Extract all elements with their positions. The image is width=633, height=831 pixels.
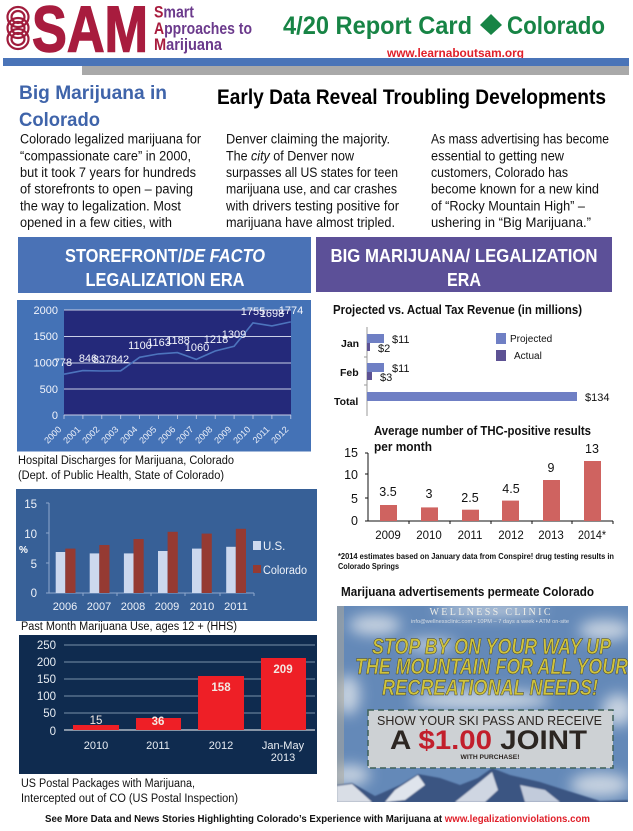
text column 2: marijuana have almost tripled.	[226, 215, 395, 230]
bar chart: tax revenue: Feb	[340, 367, 359, 379]
text column 1: but it took 7 years for hundreds	[20, 165, 196, 180]
footer link line: See More Data and News Stories Highlighting Colorado’s Experience with Marijuana at www.legalizationviolations.com	[45, 814, 590, 825]
report card title: 4/20 Report Card	[283, 12, 472, 40]
bar chart: postal packages: 36	[152, 716, 164, 728]
line chart: hospital discharges: 1163	[147, 337, 171, 349]
bar chart: postal packages	[19, 635, 317, 774]
subheading: Big Marijuana in Colorado: Colorado	[19, 109, 100, 131]
heading: THC results chart: Average number of THC-positive results	[374, 424, 591, 438]
bar chart: past month use: 2007	[87, 601, 111, 613]
line chart: hospital discharges: 2009	[212, 424, 233, 446]
text column 2: surpasses all US states for teen	[226, 165, 398, 180]
website link: www.learnaboutsam.org	[386, 48, 524, 60]
heading: tax revenue chart: Projected vs. Actual Tax Revenue (in millions)	[333, 303, 582, 317]
clinic name: WELLNESS CLINIC	[430, 607, 551, 618]
panel: storefront era banner: LEGALIZATION ERA	[86, 269, 244, 290]
coupon box	[368, 710, 613, 768]
header bars	[3, 58, 629, 75]
line chart: hospital discharges: 1218	[204, 334, 228, 346]
subheading: Big Marijuana in Colorado: Big Marijuana in	[19, 82, 167, 104]
bar chart: past month use: 2008	[121, 601, 145, 613]
bar chart: postal packages: 2010	[84, 740, 108, 752]
line chart: hospital discharges: 1100	[128, 340, 152, 352]
bar chart: postal packages: 150	[37, 674, 56, 686]
line chart: hospital discharges: 2010	[231, 424, 252, 446]
coupon box: A $1.00 JOINT	[390, 725, 588, 755]
bar chart: postal packages: Jan-May	[262, 740, 305, 752]
bar chart: past month use: 2010	[190, 601, 214, 613]
bar chart: THC positive results: 9	[548, 461, 555, 475]
advert headline	[356, 638, 628, 696]
subheading: Big Marijuana in Colorado	[19, 82, 167, 131]
bar chart: THC positive results: 5	[351, 492, 358, 506]
logo tagline	[154, 4, 252, 54]
bar chart: THC positive results: 2010	[416, 530, 442, 542]
bar chart: tax revenue: $11	[392, 334, 410, 346]
report card title	[283, 12, 605, 40]
bar chart: tax revenue: $134	[585, 392, 609, 404]
line chart: hospital discharges: 1774	[279, 305, 303, 317]
text column 2	[225, 132, 399, 230]
bar chart: THC positive results: 4.5	[502, 482, 520, 496]
bar chart: past month use: 2011	[224, 601, 248, 613]
text column 1: of storefronts to open – paving	[20, 182, 193, 196]
text column 3: ushering in “Big Marijuana.”	[431, 215, 591, 230]
bar chart: tax revenue	[334, 327, 609, 416]
bar chart: tax revenue: $11	[392, 363, 410, 375]
text column 3: become known for a new kind	[431, 182, 599, 196]
line chart: hospital discharges: 2004	[118, 424, 139, 446]
bar chart: past month use	[16, 489, 317, 621]
line chart: hospital discharges: 1000	[34, 358, 58, 370]
heading: advertisements: Marijuana advertisements permeate Colorado	[341, 585, 594, 599]
panel: big marijuana era banner	[316, 237, 612, 292]
mountains	[337, 768, 628, 803]
line chart: hospital discharges: 1698	[260, 308, 284, 320]
text column 1: Colorado legalized marijuana for	[20, 132, 201, 146]
line chart: hospital discharges: 1060	[185, 342, 209, 354]
bar chart: postal packages: 100	[37, 691, 56, 703]
caption: hospital discharges: Hospital Discharges for Marijuana, Colorado	[18, 455, 234, 467]
line chart: hospital discharges: 2012	[269, 424, 290, 446]
report card title: Colorado	[507, 12, 605, 40]
text column 2: marijuana use, and car crashes	[226, 182, 397, 196]
bar chart: postal packages: 250	[37, 640, 56, 652]
main heading: Early Data Reveal Troubling Developments	[217, 86, 606, 109]
text column 1: “compassionate care” in 2000,	[20, 148, 191, 164]
caption: postal packages: US Postal Packages with Marijuana,	[21, 778, 195, 790]
text column 3	[431, 132, 609, 230]
bar chart: past month use: 15	[24, 499, 37, 511]
line chart: hospital discharges: 2001	[61, 424, 82, 446]
header	[3, 0, 629, 75]
bar chart: past month use: 5	[31, 559, 37, 571]
bar chart: postal packages: 158	[211, 682, 231, 694]
clouds	[330, 604, 633, 797]
caption: past month use: Past Month Marijuana Use, ages 12 + (HHS)	[21, 621, 237, 633]
bar chart: THC positive results: 2.5	[461, 491, 479, 505]
line chart: hospital discharges: 2007	[174, 424, 195, 446]
heading: THC results chart	[374, 424, 591, 454]
bar chart: tax revenue: $2	[378, 343, 390, 355]
caption: hospital discharges: (Dept. of Public Health, State of Colorado)	[18, 470, 224, 482]
bar chart: postal packages: 0	[50, 726, 56, 738]
coupon box: WITH PURCHASE!	[460, 755, 520, 761]
line chart: hospital discharges: 2002	[80, 424, 101, 446]
bar chart: THC positive results: 15	[344, 446, 358, 460]
bar chart: postal packages: 2011	[146, 740, 170, 752]
bar chart: postal packages: 50	[43, 708, 56, 720]
bar chart: tax revenue: Actual	[514, 351, 542, 362]
bar chart: past month use: 0	[31, 588, 37, 600]
line chart: hospital discharges: 2000	[42, 424, 63, 446]
bar chart: postal packages: 209	[273, 664, 293, 676]
text column 2: Denver claiming the majority.	[226, 132, 390, 146]
bar chart: THC positive results: 3.5	[379, 485, 397, 499]
panel: storefront era banner: STOREFRONT/DE FACTO	[65, 245, 266, 266]
logo tagline: Marijuana	[154, 36, 223, 54]
coupon box: SHOW YOUR SKI PASS AND RECEIVE	[377, 713, 602, 728]
line chart: hospital discharges: 2008	[193, 424, 214, 446]
caption: postal packages: Intercepted out of CO (US Postal Inspection)	[21, 793, 238, 805]
bar chart: past month use: Colorado	[263, 565, 307, 577]
bar chart: THC positive results: 2011	[458, 530, 482, 542]
line chart: hospital discharges: 2005	[137, 424, 158, 446]
panel: big marijuana era banner: ERA	[447, 269, 481, 290]
bar chart: THC positive results: 2012	[498, 530, 524, 542]
photo: wellness clinic advertisement: info@wellnessclinic.com • 10PM – 7 days a week • ATM on-site	[411, 619, 569, 625]
text column 1: the way to legalization. Most	[20, 198, 181, 214]
line chart: hospital discharges: 837	[93, 354, 111, 366]
line chart: hospital discharges: 500	[40, 384, 58, 396]
text column 1: opened in a few cities, with	[20, 215, 172, 230]
line chart: hospital discharges: 2006	[156, 424, 177, 446]
bar chart: THC positive results	[344, 442, 613, 542]
line chart: hospital discharges: 842	[111, 354, 129, 366]
text column 3: As mass advertising has become	[431, 132, 609, 146]
footnote: 2014 estimates	[338, 552, 614, 571]
photo: wellness clinic advertisement	[330, 604, 633, 803]
caption: hospital discharges	[18, 455, 234, 482]
bar chart: THC positive results: 2009	[375, 530, 401, 542]
line chart: hospital discharges: 846	[79, 353, 97, 365]
line chart: hospital discharges: 2000	[34, 305, 58, 317]
footnote: 2014 estimates: Colorado Springs	[338, 562, 399, 571]
heading: THC results chart: per month	[374, 440, 432, 454]
bar chart: past month use: 2006	[53, 601, 77, 613]
text column 3: of “Rocky Mountain High” –	[431, 198, 585, 214]
line chart: hospital discharges: 0	[52, 410, 58, 422]
bar chart: THC positive results: 13	[585, 442, 599, 456]
bar chart: past month use: %	[19, 545, 28, 556]
logo tagline: Smart	[154, 4, 194, 22]
footnote: 2014 estimates: *2014 estimates based on January data from Conspire! drug testing results in	[338, 552, 614, 561]
bar chart: THC positive results: 10	[344, 468, 358, 482]
bar chart: THC positive results: 2014*	[578, 530, 606, 542]
text column 1	[20, 132, 201, 230]
bar chart: postal packages: 2013	[271, 752, 295, 764]
bar chart: past month use: 2009	[155, 601, 179, 613]
line chart: hospital discharges: 778	[54, 357, 72, 369]
bar chart: tax revenue: Projected	[510, 334, 552, 345]
line chart: hospital discharges	[17, 300, 311, 452]
line chart: hospital discharges: 2011	[251, 424, 271, 445]
caption: postal packages	[21, 778, 238, 805]
bar chart: THC positive results: 3	[426, 487, 433, 501]
text column 2: with drivers testing positive for	[225, 198, 399, 214]
bar chart: postal packages: 200	[37, 657, 56, 669]
bar chart: tax revenue: Total	[334, 396, 358, 408]
icon: SAM rings logo	[8, 7, 28, 49]
bar chart: tax revenue: Jan	[341, 338, 359, 350]
line chart: hospital discharges: 1755	[241, 306, 265, 318]
bar chart: postal packages: 2012	[209, 740, 233, 752]
panel: big marijuana era banner: BIG MARIJUANA/ LEGALIZATION	[330, 245, 598, 266]
bar chart: past month use: U.S.	[263, 541, 285, 553]
text column 2: The city of Denver now	[226, 148, 354, 164]
line chart: hospital discharges: 1500	[34, 331, 58, 343]
intro text columns	[20, 132, 609, 230]
bar chart: THC positive results: 2013	[538, 530, 564, 542]
logo tagline: Approaches to	[154, 20, 252, 38]
bar chart: tax revenue: $3	[380, 372, 392, 384]
line chart: hospital discharges: 1309	[222, 329, 246, 341]
text column 3: essential to getting new	[431, 148, 564, 164]
line chart: hospital discharges: 2003	[99, 424, 120, 446]
line chart: hospital discharges: 1188	[166, 335, 190, 347]
panel: storefront era banner	[18, 237, 311, 293]
bar chart: THC positive results: 0	[351, 514, 358, 528]
text column 3: customers, Colorado has	[431, 165, 568, 180]
bar chart: past month use: 10	[24, 529, 37, 541]
bar chart: postal packages: 15	[90, 715, 102, 727]
